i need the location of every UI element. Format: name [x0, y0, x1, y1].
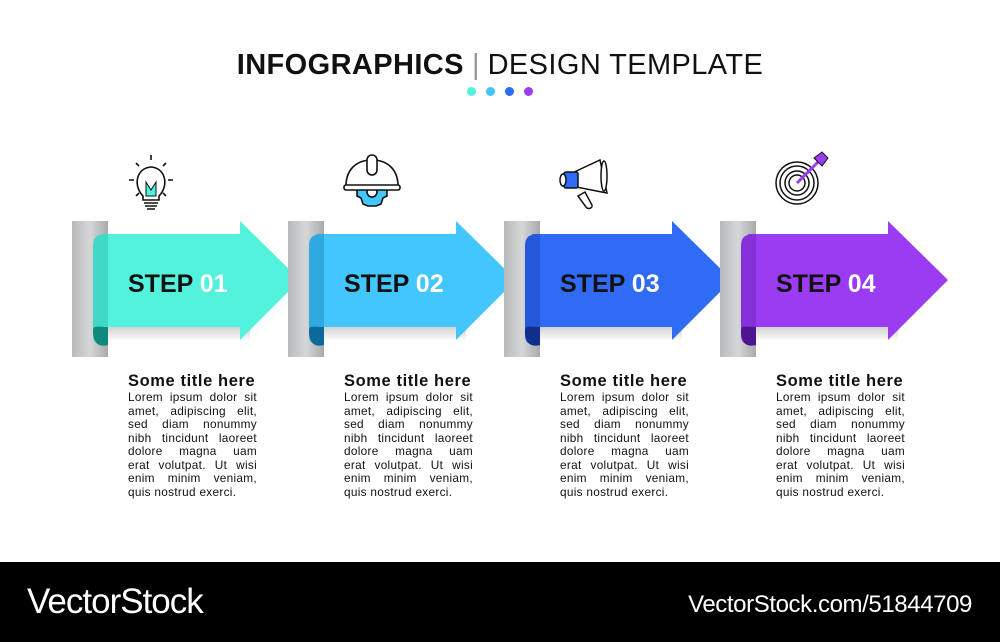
step 4 arrow — [720, 221, 948, 357]
text block 4: Lorem ipsum dolor sit — [776, 390, 905, 404]
text block 3: Some title here — [560, 372, 687, 390]
text block 1: dolore magna uam — [128, 444, 257, 458]
icon: megaphone — [560, 160, 607, 208]
text block 2: quis nostrud exerci. — [344, 484, 452, 498]
icon: target — [776, 152, 828, 204]
text block 1: erat volutpat. Ut wisi — [128, 458, 257, 472]
step 1 arrow: STEP 01 — [128, 270, 228, 298]
footer url: VectorStock.com/51844709 — [688, 591, 972, 618]
step 3 arrow — [504, 221, 732, 357]
text block 3: sed diam nonummy — [560, 417, 689, 431]
text block 3 — [560, 372, 689, 498]
footer logo: VectorStock — [27, 582, 203, 621]
icon: light bulb — [129, 155, 173, 209]
text block 4: enim minim veniam, — [776, 471, 905, 485]
step 2 arrow — [288, 221, 516, 357]
text block 3: dolore magna uam — [560, 444, 689, 458]
text block 1: nibh tincidunt laoreet — [128, 430, 257, 444]
step 4 arrow: STEP 04 — [776, 270, 876, 298]
text block 2: dolore magna uam — [344, 444, 473, 458]
text block 3: quis nostrud exerci. — [560, 484, 668, 498]
text block 3: amet, adipiscing elit, — [560, 404, 689, 418]
text block 2: Some title here — [344, 372, 471, 390]
text block 3: Lorem ipsum dolor sit — [560, 390, 689, 404]
text block 4: erat volutpat. Ut wisi — [776, 458, 905, 472]
text block 1: Lorem ipsum dolor sit — [128, 390, 257, 404]
text block 4 — [776, 372, 905, 498]
step 1 arrow — [72, 221, 300, 357]
text block 2: nibh tincidunt laoreet — [344, 430, 473, 444]
text block 1 — [128, 372, 257, 498]
text block 3: nibh tincidunt laoreet — [560, 430, 689, 444]
footer bar — [0, 562, 1000, 642]
dots — [467, 87, 533, 96]
icon: helmet gear — [344, 155, 400, 206]
text block 2: erat volutpat. Ut wisi — [344, 458, 473, 472]
text block 4: nibh tincidunt laoreet — [776, 430, 905, 444]
text block 2: amet, adipiscing elit, — [344, 404, 473, 418]
text block 1: sed diam nonummy — [128, 417, 257, 431]
title: INFOGRAPHICS | DESIGN TEMPLATE — [237, 49, 763, 81]
text block 2 — [344, 372, 473, 498]
text block 4: sed diam nonummy — [776, 417, 905, 431]
text block 4: Some title here — [776, 372, 903, 390]
text block 3: enim minim veniam, — [560, 471, 689, 485]
text block 1: amet, adipiscing elit, — [128, 404, 257, 418]
text block 4: quis nostrud exerci. — [776, 484, 884, 498]
step 3 arrow: STEP 03 — [560, 270, 660, 298]
text block 2: enim minim veniam, — [344, 471, 473, 485]
step 2 arrow: STEP 02 — [344, 270, 444, 298]
text block 1: Some title here — [128, 372, 255, 390]
text block 3: erat volutpat. Ut wisi — [560, 458, 689, 472]
text block 2: Lorem ipsum dolor sit — [344, 390, 473, 404]
text block 1: quis nostrud exerci. — [128, 484, 236, 498]
text block 2: sed diam nonummy — [344, 417, 473, 431]
text block 4: amet, adipiscing elit, — [776, 404, 905, 418]
text block 4: dolore magna uam — [776, 444, 905, 458]
text block 1: enim minim veniam, — [128, 471, 257, 485]
